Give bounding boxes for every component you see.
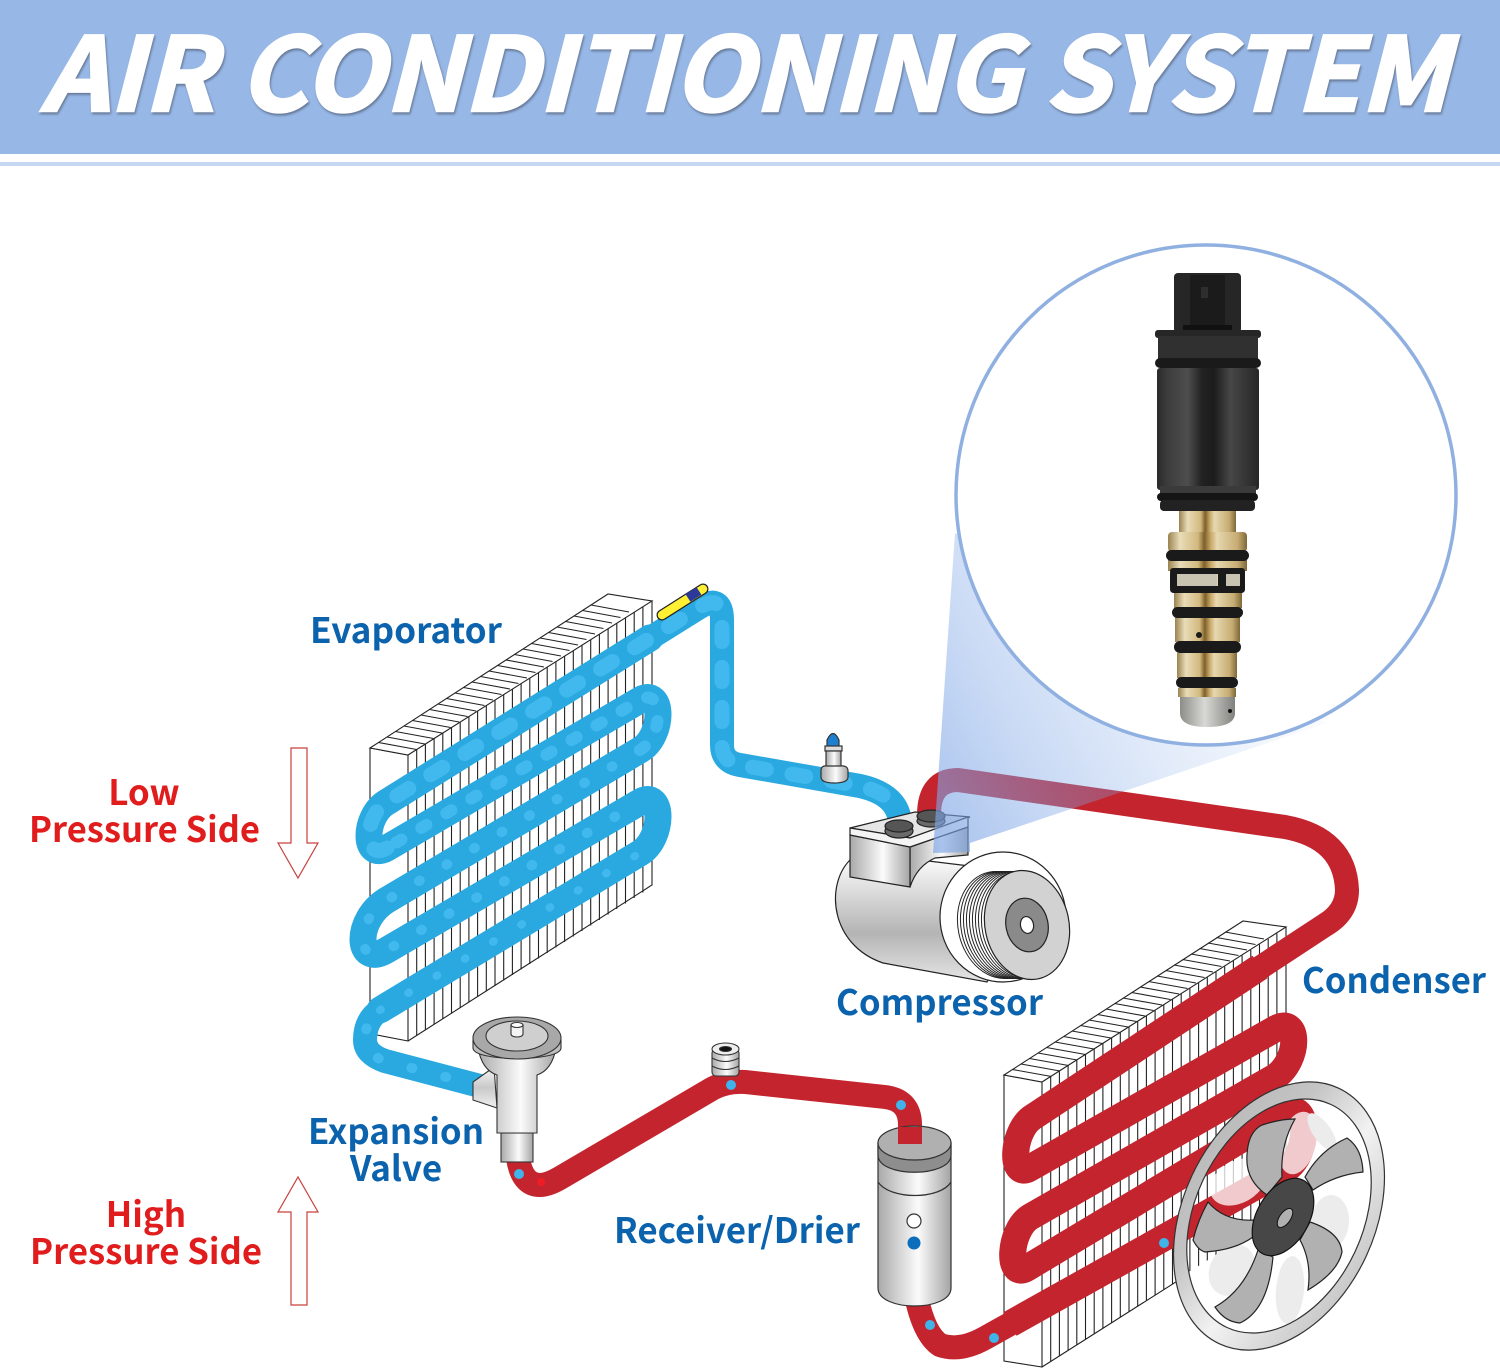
condenser core: [1004, 921, 1286, 1367]
label: expansion valve: [308, 1104, 484, 1192]
label: high pressure side: Pressure Side: [30, 1224, 262, 1275]
evaporator core: [370, 594, 652, 1041]
label: condenser: Condenser: [1302, 953, 1487, 1004]
fan ghost blades: [1199, 1109, 1351, 1325]
label: evaporator: Evaporator: [310, 603, 503, 654]
label: expansion valve: Expansion: [308, 1104, 484, 1155]
fan hub centre: [1274, 1206, 1296, 1230]
cooling fan: [1174, 1082, 1384, 1350]
label: high pressure side: [30, 1187, 262, 1275]
fan hub: [1239, 1168, 1327, 1266]
label: low pressure side: [29, 765, 260, 853]
liquid line: expansion valve to drier: [518, 1082, 910, 1185]
flow dots: [514, 1080, 1169, 1343]
arrow: low pressure down: [278, 748, 318, 878]
fan blades: [1193, 1119, 1363, 1323]
label: low pressure side: Low: [108, 765, 180, 816]
icon: high side port: [712, 1043, 739, 1076]
icon: low side service port: [821, 734, 848, 783]
label: compressor: Compressor: [836, 975, 1044, 1026]
label: high pressure side: High: [106, 1187, 186, 1238]
magnifier beam: [933, 533, 1327, 853]
header banner: [0, 0, 1500, 166]
label: expansion valve: Valve: [349, 1141, 442, 1192]
fan interior clear area: [1187, 1225, 1350, 1335]
receiver drier: [878, 1126, 951, 1306]
high pressure pipe: compressor to condenser to drier: [917, 780, 1347, 1347]
label: low pressure side: Pressure Side: [29, 802, 260, 853]
compressor: [835, 810, 1080, 988]
label: receiver drier: Receiver/Drier: [614, 1203, 861, 1254]
low pressure pipe: evaporator loop: [363, 603, 900, 1086]
icon: thermal bulb: [662, 589, 703, 615]
magnifier circle: [956, 245, 1456, 745]
control valve product photo: [1155, 273, 1261, 727]
expansion valve: [473, 1017, 561, 1162]
fan rim: [1174, 1082, 1384, 1350]
arrow: high pressure up: [278, 1177, 318, 1305]
fan blur shading: [1202, 1107, 1324, 1215]
